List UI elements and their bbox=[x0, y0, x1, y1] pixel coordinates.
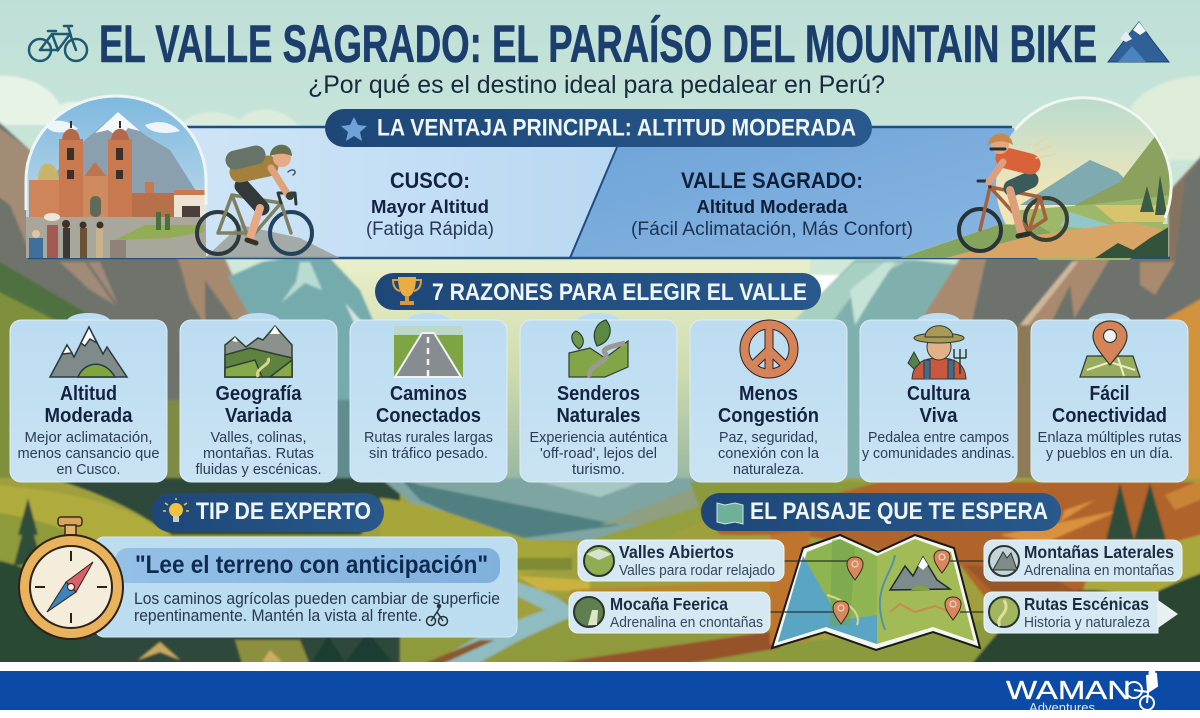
card: Menos Congestión: Paz, seguridad, bbox=[719, 430, 818, 446]
card: Geografía Variada: Variada bbox=[225, 404, 293, 427]
card: Caminos Conectados: Conectados bbox=[376, 404, 481, 427]
card: Senderos Naturales: Senderos bbox=[557, 382, 640, 405]
pill: main advantage heading bbox=[325, 109, 872, 147]
tip body text: repentinamente. Mantén la vista al frente. bbox=[134, 607, 422, 625]
icon: small map bbox=[717, 503, 743, 524]
panel: landscape bbox=[569, 493, 1182, 650]
icon: road bbox=[394, 326, 463, 377]
pill: expert tip heading: TIP DE EXPERTO bbox=[196, 498, 371, 525]
icon: hills bbox=[225, 326, 292, 377]
card: Altitud Moderada: Moderada bbox=[44, 404, 133, 427]
right mountain bbox=[1014, 323, 1034, 480]
title block bbox=[29, 14, 1169, 99]
pill: 7 reasons heading: 7 RAZONES PARA ELEGIR EL VALLE bbox=[432, 279, 807, 306]
card: Senderos Naturales: turismo. bbox=[572, 462, 625, 478]
illustration: Cusco cathedral scene bbox=[26, 94, 208, 260]
card: Caminos Conectados: Caminos bbox=[390, 382, 467, 405]
icon: peace sign bbox=[744, 324, 794, 374]
text: Cusco comparison: Mayor Altitud bbox=[371, 196, 489, 217]
tip body text bbox=[134, 590, 500, 625]
text: Valle Sagrado comparison: (Fácil Aclimatación, Más Confort) bbox=[631, 219, 913, 240]
label: Mocaña Feerica bbox=[569, 592, 770, 633]
icon: pin 3 bbox=[934, 550, 950, 573]
card: Cultura Viva: Viva bbox=[920, 404, 958, 427]
panel: Valle Sagrado side bbox=[570, 128, 1040, 258]
logo: Waman Adventures: WAMAN bbox=[1006, 675, 1131, 705]
label: Valles Abiertos bbox=[578, 540, 784, 581]
orange slopes bbox=[699, 481, 1200, 598]
card: Menos Congestión: Menos bbox=[739, 382, 798, 405]
card: Caminos Conectados: sin tráfico pesado. bbox=[369, 446, 488, 462]
illustration: Valle Sagrado scene bbox=[900, 100, 1170, 260]
central river and hills bbox=[380, 478, 720, 540]
icon: pin 4 bbox=[945, 597, 961, 620]
icon: trail and leaves bbox=[569, 320, 628, 377]
card: Altitud Moderada: Altitud bbox=[60, 382, 117, 405]
text: Valle Sagrado comparison: VALLE SAGRADO: bbox=[681, 168, 863, 193]
panel: expert tip bbox=[19, 493, 517, 639]
label: Rutas Escénicas bbox=[984, 592, 1178, 633]
icon: pin 2 bbox=[833, 601, 849, 624]
card: Menos Congestión: Congestión bbox=[718, 404, 819, 427]
label: Valles Abiertos: Valles para rodar relajado bbox=[619, 563, 775, 579]
card: Caminos Conectados bbox=[350, 313, 507, 482]
card: Caminos Conectados: Rutas rurales largas bbox=[364, 430, 493, 446]
icon: pin 1 bbox=[847, 557, 863, 580]
label: Montañas Laterales: Adrenalina en montañas bbox=[1024, 563, 1174, 579]
logo: Waman Adventures bbox=[1006, 671, 1158, 710]
pill: main advantage heading: LA VENTAJA PRINCIPAL: ALTITUD MODERADA bbox=[377, 114, 856, 142]
card: Fácil Conectividad: Conectividad bbox=[1052, 404, 1167, 427]
icon: map pin bbox=[1080, 321, 1140, 377]
card: Senderos Naturales: 'off-road', lejos del bbox=[540, 446, 657, 462]
text: Valle Sagrado comparison: Altitud Moderada bbox=[696, 196, 848, 217]
icon: valley bbox=[584, 546, 614, 576]
card: Fácil Conectividad: y pueblos en un día. bbox=[1046, 446, 1173, 462]
text: Cusco comparison: CUSCO: bbox=[390, 168, 470, 193]
label: Montañas Laterales bbox=[984, 540, 1182, 581]
card: Senderos Naturales: Naturales bbox=[556, 404, 640, 427]
card: Senderos Naturales: Experiencia auténtica bbox=[530, 430, 668, 446]
tip box bbox=[95, 537, 517, 637]
map illustration bbox=[770, 535, 984, 650]
card: Altitud Moderada: Mejor aclimatación, bbox=[24, 430, 152, 446]
illustration: happy cyclist bbox=[959, 134, 1067, 251]
card: Menos Congestión: conexión con la bbox=[718, 446, 820, 462]
panel: main advantage bbox=[26, 90, 1180, 260]
icon: forest trail bbox=[574, 597, 604, 627]
footer bar bbox=[0, 671, 1200, 710]
icon: mountain bbox=[1108, 22, 1169, 62]
card: Altitud Moderada bbox=[10, 313, 167, 482]
icon: mountains bbox=[50, 327, 127, 377]
card: Cultura Viva: Pedalea entre campos bbox=[868, 430, 1009, 446]
pill: landscape heading bbox=[701, 493, 1061, 531]
card: Geografía Variada bbox=[180, 313, 337, 482]
icon: small cyclist bbox=[426, 604, 448, 626]
text: Cusco comparison: (Fatiga Rápida) bbox=[366, 219, 494, 240]
card: Cultura Viva: Cultura bbox=[907, 382, 971, 405]
card: Altitud Moderada: en Cusco. bbox=[56, 462, 120, 478]
text: Cusco comparison bbox=[366, 168, 494, 240]
card: Menos Congestión: naturaleza. bbox=[733, 462, 804, 478]
card: Cultura Viva bbox=[860, 313, 1017, 482]
valley floor base bbox=[0, 476, 1200, 646]
icon: mountain bbox=[989, 546, 1019, 576]
panel: Cusco side bbox=[30, 128, 625, 258]
quote band bbox=[115, 548, 500, 583]
icon: bicycle bbox=[29, 26, 87, 61]
label: Mocaña Feerica: Adrenalina en cnontañas bbox=[610, 615, 763, 631]
icon: farmer bbox=[908, 326, 966, 379]
card: Cultura Viva: y comunidades andinas. bbox=[862, 446, 1015, 462]
pill: expert tip heading bbox=[151, 493, 384, 532]
icon: star bbox=[341, 117, 367, 141]
card: Geografía Variada: Geografía bbox=[216, 382, 302, 405]
icon: logo cyclist bbox=[1126, 670, 1157, 710]
card: Fácil Conectividad: Fácil bbox=[1090, 382, 1130, 405]
illustration: tired cyclist bbox=[197, 145, 340, 258]
text: Valle Sagrado comparison bbox=[631, 168, 913, 240]
icon: trophy bbox=[393, 277, 421, 305]
tip body text: Los caminos agrícolas pueden cambiar de superficie bbox=[134, 590, 500, 608]
pill: 7 reasons heading bbox=[375, 273, 821, 310]
label: Valles Abiertos: Valles Abiertos bbox=[619, 542, 734, 562]
subtitle: ¿Por qué es el destino ideal para pedalear en Perú? bbox=[308, 71, 885, 99]
left forest and hills bbox=[50, 478, 400, 535]
card: Geografía Variada: montañas. Rutas bbox=[203, 446, 314, 462]
icon: light bulb bbox=[163, 498, 189, 522]
label: Mocaña Feerica: Mocaña Feerica bbox=[610, 594, 728, 614]
card: Fácil Conectividad: Enlaza múltiples rutas bbox=[1038, 430, 1182, 446]
teal central mountains bbox=[228, 259, 374, 402]
label: Rutas Escénicas: Rutas Escénicas bbox=[1024, 594, 1149, 614]
card: Fácil Conectividad bbox=[1031, 313, 1188, 482]
card: Altitud Moderada: menos cansancio que bbox=[18, 446, 160, 462]
pill: landscape heading: EL PAISAJE QUE TE ESPERA bbox=[750, 498, 1048, 525]
card: Senderos Naturales bbox=[520, 313, 677, 482]
card: Geografía Variada: fluidas y escénicas. bbox=[196, 462, 322, 478]
icon: scenic route bbox=[989, 597, 1019, 627]
card: Menos Congestión bbox=[690, 320, 847, 482]
label: Montañas Laterales: Montañas Laterales bbox=[1024, 542, 1174, 562]
logo: Waman Adventures: Adventures bbox=[1029, 700, 1095, 715]
label: Rutas Escénicas: Historia y naturaleza bbox=[1024, 615, 1151, 631]
tip quote: "Lee el terreno con anticipación" bbox=[135, 551, 488, 579]
card: Geografía Variada: Valles, colinas, bbox=[210, 430, 306, 446]
icon: compass bbox=[19, 517, 123, 639]
left mountain bbox=[0, 121, 235, 402]
